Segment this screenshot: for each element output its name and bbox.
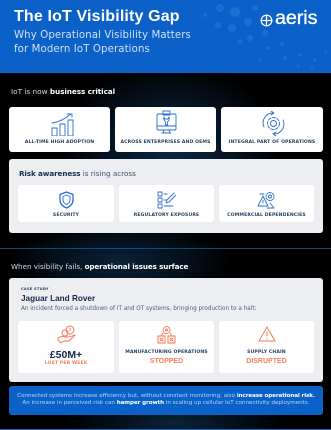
label: REGULATORY EXPOSURE <box>134 212 199 218</box>
status: STOPPED <box>150 358 183 364</box>
panel: risk awareness <box>9 159 323 233</box>
card: financial loss <box>18 321 114 373</box>
label: ALL-TIME HIGH ADOPTION <box>25 140 94 144</box>
card: security <box>18 185 114 222</box>
case title: Jaguar Land Rover <box>21 294 95 302</box>
heading: business critical: IoT is now business critical <box>11 87 115 96</box>
callout <box>9 386 323 414</box>
label: SECURITY <box>53 212 79 218</box>
label: COMMERCIAL DEPENDENCIES <box>227 212 306 218</box>
subtitle: Why Operational Visibility Matters <box>14 30 191 41</box>
subtitle: for Modern IoT Operations <box>14 44 150 55</box>
icon: growth bars <box>52 114 74 136</box>
icon: monitor with tool <box>156 110 176 134</box>
status: DISRUPTED <box>246 358 287 364</box>
subtitle <box>14 30 191 55</box>
loss value: £50M+ <box>50 349 82 361</box>
label: MANUFACTURING OPERATIONS <box>125 350 208 355</box>
footer strip <box>0 429 331 430</box>
callout: An increase in perceived risk can hamper growth in scaling up cellular IoT connectivity deployments. <box>22 400 310 406</box>
card: manufacturing <box>119 321 214 373</box>
card: adoption <box>9 107 110 152</box>
icon: checklist <box>158 192 176 208</box>
title: The IoT Visibility Gap <box>14 8 180 25</box>
card: regulatory <box>119 185 214 222</box>
label: ACROSS ENTERPRISES AND OEMS <box>120 140 211 144</box>
label: SUPPLY CHAIN <box>247 350 286 355</box>
risk heading: Risk awareness is rising across <box>19 169 136 178</box>
card: supply chain <box>219 321 314 373</box>
icon: shield <box>59 191 74 209</box>
icon: warning triangle <box>258 326 276 342</box>
section divider <box>0 248 331 249</box>
icon: hand with coins <box>58 326 76 344</box>
icon: gear and boxes <box>158 326 176 344</box>
header dot pattern <box>203 4 328 70</box>
logo: aeris <box>260 7 317 29</box>
eyebrow: CASE STUDY <box>21 287 49 291</box>
card: operations <box>221 107 323 152</box>
icon: warning and gears <box>258 192 274 208</box>
label: INTEGRAL PART OF OPERATIONS <box>229 140 315 144</box>
card: enterprises <box>115 107 216 152</box>
callout: Connected systems increase efficiency but, without constant monitoring, also increase operational risk. <box>17 393 315 399</box>
case description: An incident forced a shutdown of IT and OT systems, bringing production to a halt: <box>21 306 257 312</box>
heading: operational issues: When visibility fails, operational issues surface <box>11 262 188 271</box>
card: commercial <box>219 185 314 222</box>
icon: gear cycle <box>262 111 284 136</box>
logo wordmark: aeris <box>275 7 317 29</box>
panel: case study <box>9 278 323 382</box>
loss label: LOST PER WEEK <box>45 360 87 366</box>
icon: globe <box>260 14 273 27</box>
header banner <box>0 0 331 73</box>
